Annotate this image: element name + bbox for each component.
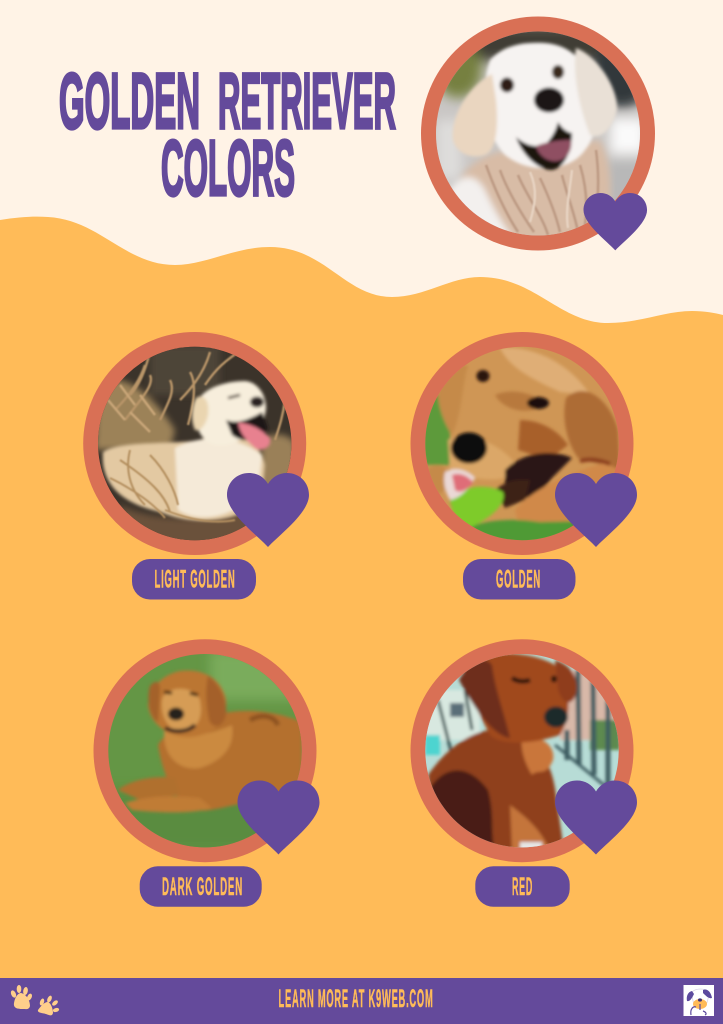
title [59,56,396,212]
footer bar: LEARN MORE AT K9WEB.COM [278,985,434,1013]
hero photo: white golden retriever [421,16,655,250]
yellow wave background [0,217,723,980]
card: dark golden [94,639,320,907]
label: golden [463,559,576,600]
text: RETRIEVER [218,56,396,145]
card: light golden [83,332,309,600]
label: red: RED [512,873,533,901]
icon: k9web logo [684,985,714,1016]
footer bar [0,978,723,1024]
icon: paw prints [10,985,60,1015]
icon: heart [555,473,637,547]
icon: heart [227,473,309,547]
card: dark golden: DARK GOLDEN [162,873,243,901]
card: light golden: LIGHT GOLDEN [154,566,236,594]
label: golden: GOLDEN [496,566,541,594]
title: GOLDEN [59,56,200,145]
label: red [475,866,570,907]
label: light golden [132,559,256,600]
card: golden [410,332,637,600]
icon: heart [555,780,637,854]
title: COLORS [161,123,295,212]
label: dark golden [140,866,262,907]
icon: heart [584,193,647,250]
icon: heart [238,780,320,854]
card: red [410,639,637,907]
